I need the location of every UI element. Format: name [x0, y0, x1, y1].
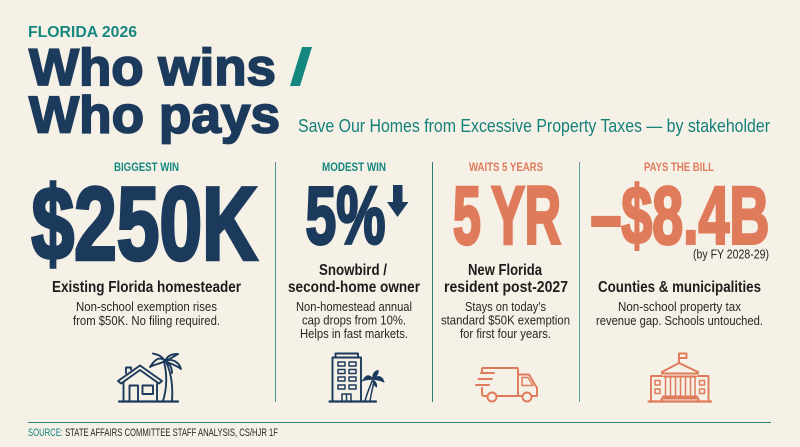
stat: $250K: $250K — [32, 166, 258, 282]
title slash — [290, 47, 312, 86]
label: pays the bill: PAYS THE BILL — [644, 160, 714, 174]
heading: Counties & municipalities — [598, 279, 761, 296]
description — [441, 299, 570, 341]
eyebrow: Florida 2026: FLORIDA 2026 — [28, 24, 137, 41]
description — [596, 299, 763, 328]
description: Stays on today's — [465, 299, 546, 314]
description: for first four years. — [460, 326, 551, 341]
description: Non-school exemption rises — [76, 299, 217, 314]
heading: Snowbird / — [319, 262, 387, 279]
icon: house with palm tree — [118, 354, 181, 402]
header block — [28, 24, 770, 144]
heading — [444, 262, 568, 296]
icon: government building — [648, 354, 711, 402]
description: Non-school property tax — [618, 299, 741, 314]
panel: existing Florida homesteader — [32, 160, 258, 402]
description: cap drops from 10%. — [302, 312, 406, 328]
panel: new Florida resident post-2027 — [441, 160, 570, 402]
heading: Existing Florida homesteader — [52, 279, 241, 296]
stat: 5%: 5% — [306, 170, 386, 262]
description — [73, 299, 220, 328]
label: modest win: MODEST WIN — [322, 160, 386, 174]
label: biggest win: BIGGEST WIN — [114, 160, 179, 174]
description: standard $50K exemption — [441, 312, 570, 328]
heading: resident post-2027 — [444, 279, 568, 296]
heading — [288, 262, 420, 296]
description — [296, 299, 412, 341]
source footer: SOURCE: STATE AFFAIRS COMMITTEE STAFF ANALYSIS, CS/HJR 1F — [28, 427, 278, 439]
icon: condo building with palm — [330, 354, 384, 402]
label: waits 5 years: WAITS 5 YEARS — [469, 160, 543, 174]
title line 1: Who wins — [29, 39, 276, 97]
stat: 5 YR: 5 YR — [453, 171, 561, 262]
title line 2: Who pays — [29, 86, 280, 144]
panel: counties and municipalities — [590, 160, 770, 402]
description: Non-homestead annual — [296, 299, 412, 314]
heading: second-home owner — [288, 279, 420, 296]
timing note: (by FY 2028-29) — [693, 248, 769, 262]
description: from $50K. No filing required. — [73, 313, 220, 328]
icon: moving truck — [476, 368, 537, 402]
heading: New Florida — [468, 262, 542, 279]
panel: snowbird / second-home owner — [288, 160, 420, 402]
icon: down arrow — [387, 185, 408, 217]
description: revenue gap. Schools untouched. — [596, 313, 763, 328]
description: Helps in fast markets. — [300, 326, 408, 341]
